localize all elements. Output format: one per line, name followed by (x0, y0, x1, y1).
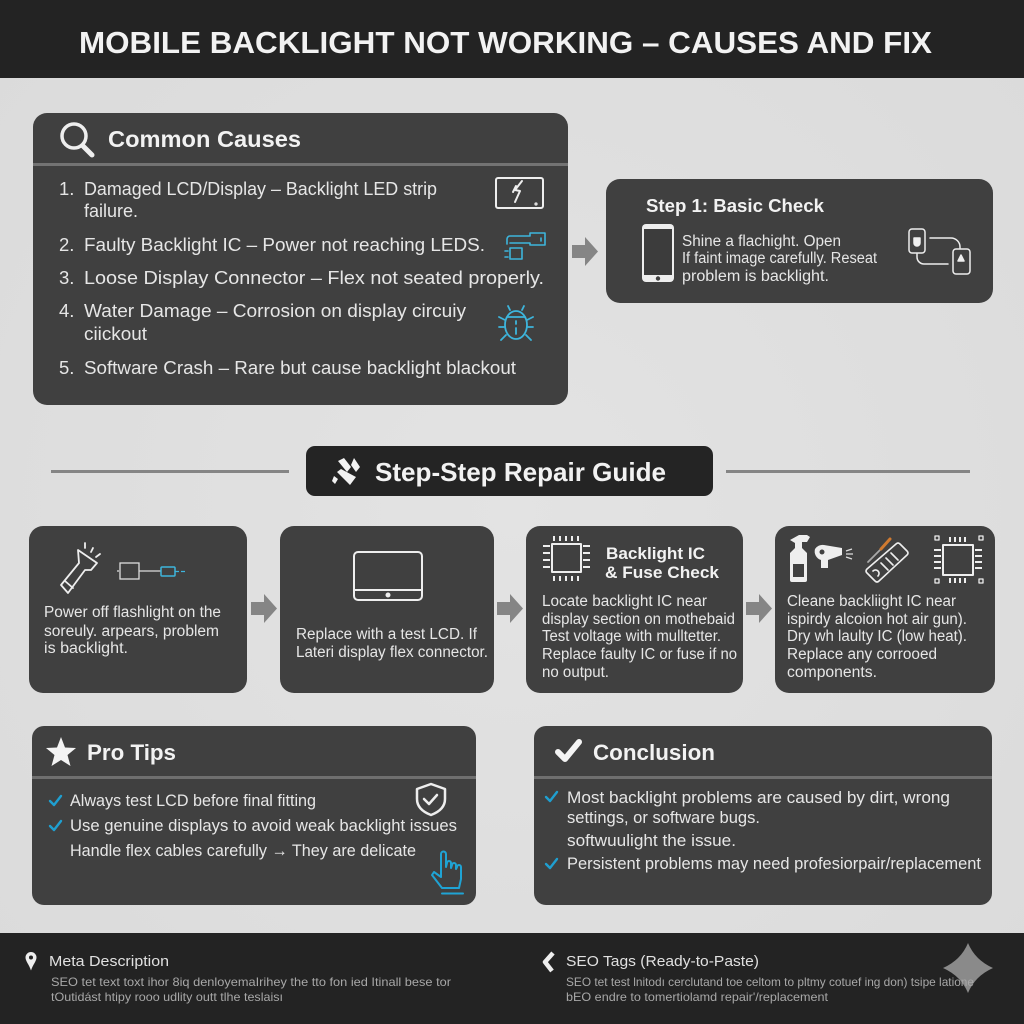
panel: step card test LCD (280, 526, 494, 693)
causes list: failure. (84, 200, 138, 221)
conclusion list: Persistent problems may need profesiorpair/replacement (567, 855, 981, 873)
footer band (0, 933, 1024, 1024)
meta description: Meta Description (49, 954, 169, 970)
arrow: step 2 to 3 (497, 594, 523, 623)
causes list: Water Damage – Corrosion on display circuiy (84, 300, 467, 321)
causes list: 2. (59, 234, 74, 255)
icon: shield check (417, 784, 445, 815)
panel: step 1 basic check (606, 179, 993, 303)
conclusion list (546, 789, 981, 873)
card text: Power off flashlight on the (44, 604, 221, 621)
icon: star (46, 737, 76, 766)
tips list: Use genuine displays to avoid weak backlight issues (70, 817, 457, 835)
step 1 text: Shine a flachight. Open (682, 233, 841, 250)
panel: step card flashlight (29, 526, 247, 693)
panel: step card clean and replace (775, 526, 995, 693)
icon: sparkle (943, 943, 993, 993)
icon: check mark (558, 742, 579, 759)
card text: no output. (542, 664, 609, 681)
tips list: Handle flex cables carefully → They are delicate (70, 842, 416, 860)
arrow: step 3 to 4 (746, 594, 772, 623)
causes list: 1. (59, 178, 74, 199)
heading: IC and fuse check: Backlight IC (606, 544, 705, 563)
icon: tag (545, 953, 553, 971)
heading: IC and fuse check (605, 544, 720, 582)
card text: components. (787, 664, 877, 681)
causes list (59, 178, 544, 378)
icon: tools (332, 458, 360, 485)
card text (787, 593, 967, 681)
icon: chip (543, 536, 590, 581)
icon: hair dryer (815, 545, 853, 568)
card text: Cleane backliight IC near (787, 593, 956, 610)
heading: IC and fuse check: & Fuse Check (605, 563, 720, 582)
panel: step card IC check (526, 526, 743, 693)
conclusion list: settings, or software bugs. (567, 809, 760, 827)
heading: step 1: Step 1: Basic Check (646, 196, 825, 216)
icon: spray bottle (790, 535, 810, 582)
card text: Test voltage with mulltetter. (542, 628, 721, 645)
step 1 text: problem is backlight. (682, 268, 829, 285)
conclusion list: Most backlight problems are caused by dirt, wrong (567, 789, 950, 807)
seo tags (566, 954, 974, 1004)
icon: tablet (354, 552, 422, 600)
causes list: Damaged LCD/Display – Backlight LED strip (84, 178, 437, 199)
arrow: causes to step 1 (572, 237, 598, 266)
panel: common causes (33, 113, 568, 405)
tips list: Always test LCD before final fitting (70, 792, 316, 810)
causes list: Software Crash – Rare but cause backlight blackout (84, 357, 516, 378)
seo tags: SEO tet test lnitodı cerclutand toe celtom to pltmy cotuef ing don) tsipe latione (566, 975, 974, 989)
panel: conclusion (534, 726, 992, 905)
card text: Replace with a test LCD. If (296, 626, 478, 643)
seo tags: bEO endre to tomertiolamd repair'/replacement (566, 990, 829, 1004)
icon: magnifier (62, 124, 92, 155)
meta description (49, 954, 451, 1004)
heading: conclusion: Conclusion (593, 740, 715, 765)
title banner: MOBILE BACKLIGHT NOT WORKING – CAUSES AND FIX (79, 25, 932, 60)
icon: bug (499, 306, 533, 340)
card text: soreuly. arpears, problem (44, 623, 219, 640)
icon: location pin (26, 952, 36, 970)
icon: multimeter (866, 539, 908, 582)
icon: connector (117, 563, 185, 579)
card text (44, 604, 221, 657)
causes list: 5. (59, 357, 74, 378)
heading: pro tips: Pro Tips (87, 740, 176, 765)
causes list: Faulty Backlight IC – Power not reaching LEDS. (84, 234, 485, 255)
card text: ispirdy alcoion hot air gun). (787, 611, 967, 628)
seo tags: SEO Tags (Ready-to-Paste) (566, 954, 759, 970)
step 1 text: If faint image carefully. Reseat (682, 250, 878, 267)
section divider lines (51, 470, 970, 473)
card text: Dry wh laulty IC (low heat). (787, 628, 967, 645)
icon: cracked display (496, 178, 543, 208)
meta description: tOutidást htipy rooo udlity outt tlhe teslaisı (51, 990, 283, 1004)
card text: is backlight. (44, 640, 128, 657)
icon: flashlight (61, 543, 100, 593)
card text (542, 593, 737, 681)
arrow: step 1 to 2 (251, 594, 277, 623)
card text: Locate backlight IC near (542, 593, 707, 610)
card text: Lateri display flex connector. (296, 644, 488, 661)
causes list: ciickout (84, 323, 147, 344)
title banner (0, 0, 1024, 78)
heading pill: repair guide: Step-Step Repair Guide (375, 457, 666, 487)
icon: phone (642, 224, 674, 282)
card text: Replace any corrooed (787, 646, 937, 663)
causes list: 4. (59, 300, 74, 321)
card text: Replace faulty IC or fuse if no (542, 646, 737, 663)
step 1 text (682, 233, 878, 285)
causes list: Loose Display Connector – Flex not seated properly. (84, 267, 544, 288)
icon: pointing hand (432, 852, 463, 894)
icon: chip with pads (934, 536, 983, 583)
heading pill: repair guide (306, 446, 713, 496)
panel: pro tips (32, 726, 476, 905)
causes list: 3. (59, 267, 74, 288)
card text: display section on mothebaid (542, 611, 735, 628)
icon: connected devices (909, 229, 970, 274)
heading: common causes: Common Causes (108, 126, 301, 152)
meta description: SEO tet text toxt ihor 8iq denloyemaIrihey the tto fon ied Itinall bese tor (51, 975, 451, 989)
conclusion list: softwuulight the issue. (567, 832, 736, 850)
tips list (50, 792, 457, 860)
card text (296, 626, 488, 661)
icon: power connector (505, 233, 545, 259)
